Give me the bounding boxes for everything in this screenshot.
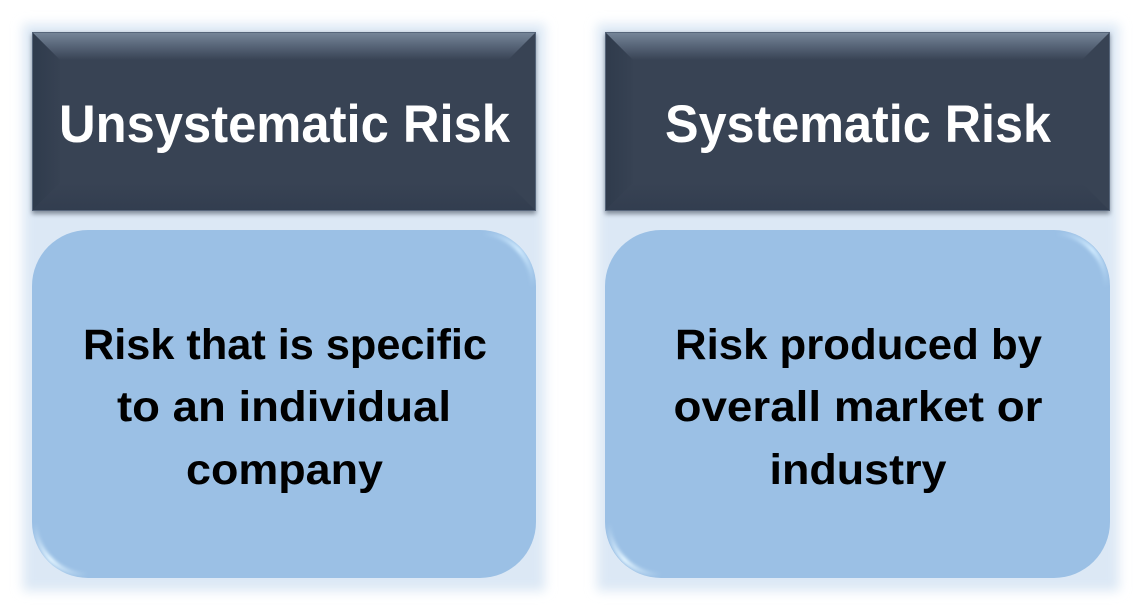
panel background glow	[23, 24, 545, 591]
description card	[32, 230, 536, 578]
header: systematic risk	[605, 32, 1110, 214]
description text: industry	[770, 446, 947, 494]
description text: company	[186, 446, 383, 494]
header: unsystematic risk	[32, 32, 536, 214]
panel: systematic risk	[597, 24, 1119, 591]
panel background glow	[597, 24, 1119, 591]
heading text: Unsystematic Risk	[59, 95, 510, 154]
description text: Risk produced by	[675, 321, 1042, 369]
description text	[83, 321, 487, 494]
description text	[674, 321, 1043, 494]
description text: Risk that is specific	[83, 321, 487, 369]
panel: unsystematic risk	[23, 24, 545, 591]
description card	[605, 230, 1110, 578]
description text: to an individual	[117, 383, 451, 431]
description text: overall market or	[674, 383, 1043, 431]
heading text: Systematic Risk	[665, 95, 1051, 154]
